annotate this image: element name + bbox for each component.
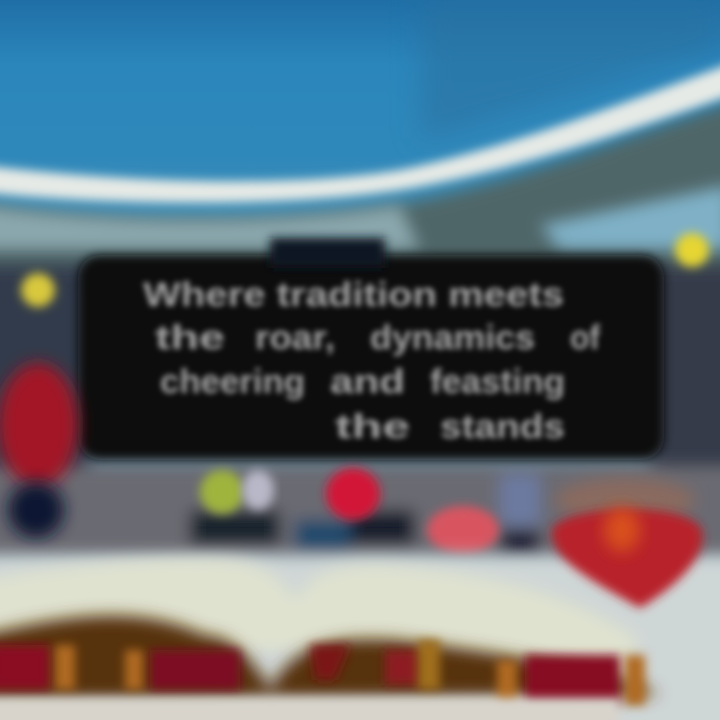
- panel headline: Where tradition meets: [143, 276, 564, 314]
- yellow lights: [21, 233, 709, 307]
- red heart balloon: [552, 478, 703, 608]
- crowd: [0, 465, 720, 560]
- panel headline: the: [155, 319, 225, 357]
- panel headline: [143, 276, 601, 446]
- ground: [0, 555, 720, 720]
- left stand: [0, 265, 90, 495]
- book pages: [0, 559, 640, 670]
- book cover shadow: [0, 616, 660, 700]
- dark text panel: [78, 238, 664, 460]
- panel headline: dynamics: [370, 319, 535, 357]
- panel headline: and: [330, 363, 405, 401]
- crowd colour spots: [200, 468, 499, 554]
- panel headline: the: [335, 408, 410, 446]
- white foreground strip: [0, 698, 620, 720]
- panel headline: cheering: [160, 363, 305, 401]
- sky: [0, 0, 720, 260]
- book red panels: [0, 645, 620, 705]
- panel headline: stands: [440, 408, 565, 446]
- stadium roof: [0, 60, 720, 280]
- open book: [0, 559, 660, 705]
- panel headline: roar,: [255, 319, 335, 357]
- book gold details: [55, 640, 645, 705]
- person in red: [0, 363, 78, 538]
- panel headline: feasting: [430, 363, 565, 401]
- right stand: [650, 265, 720, 505]
- panel headline: of: [570, 319, 601, 357]
